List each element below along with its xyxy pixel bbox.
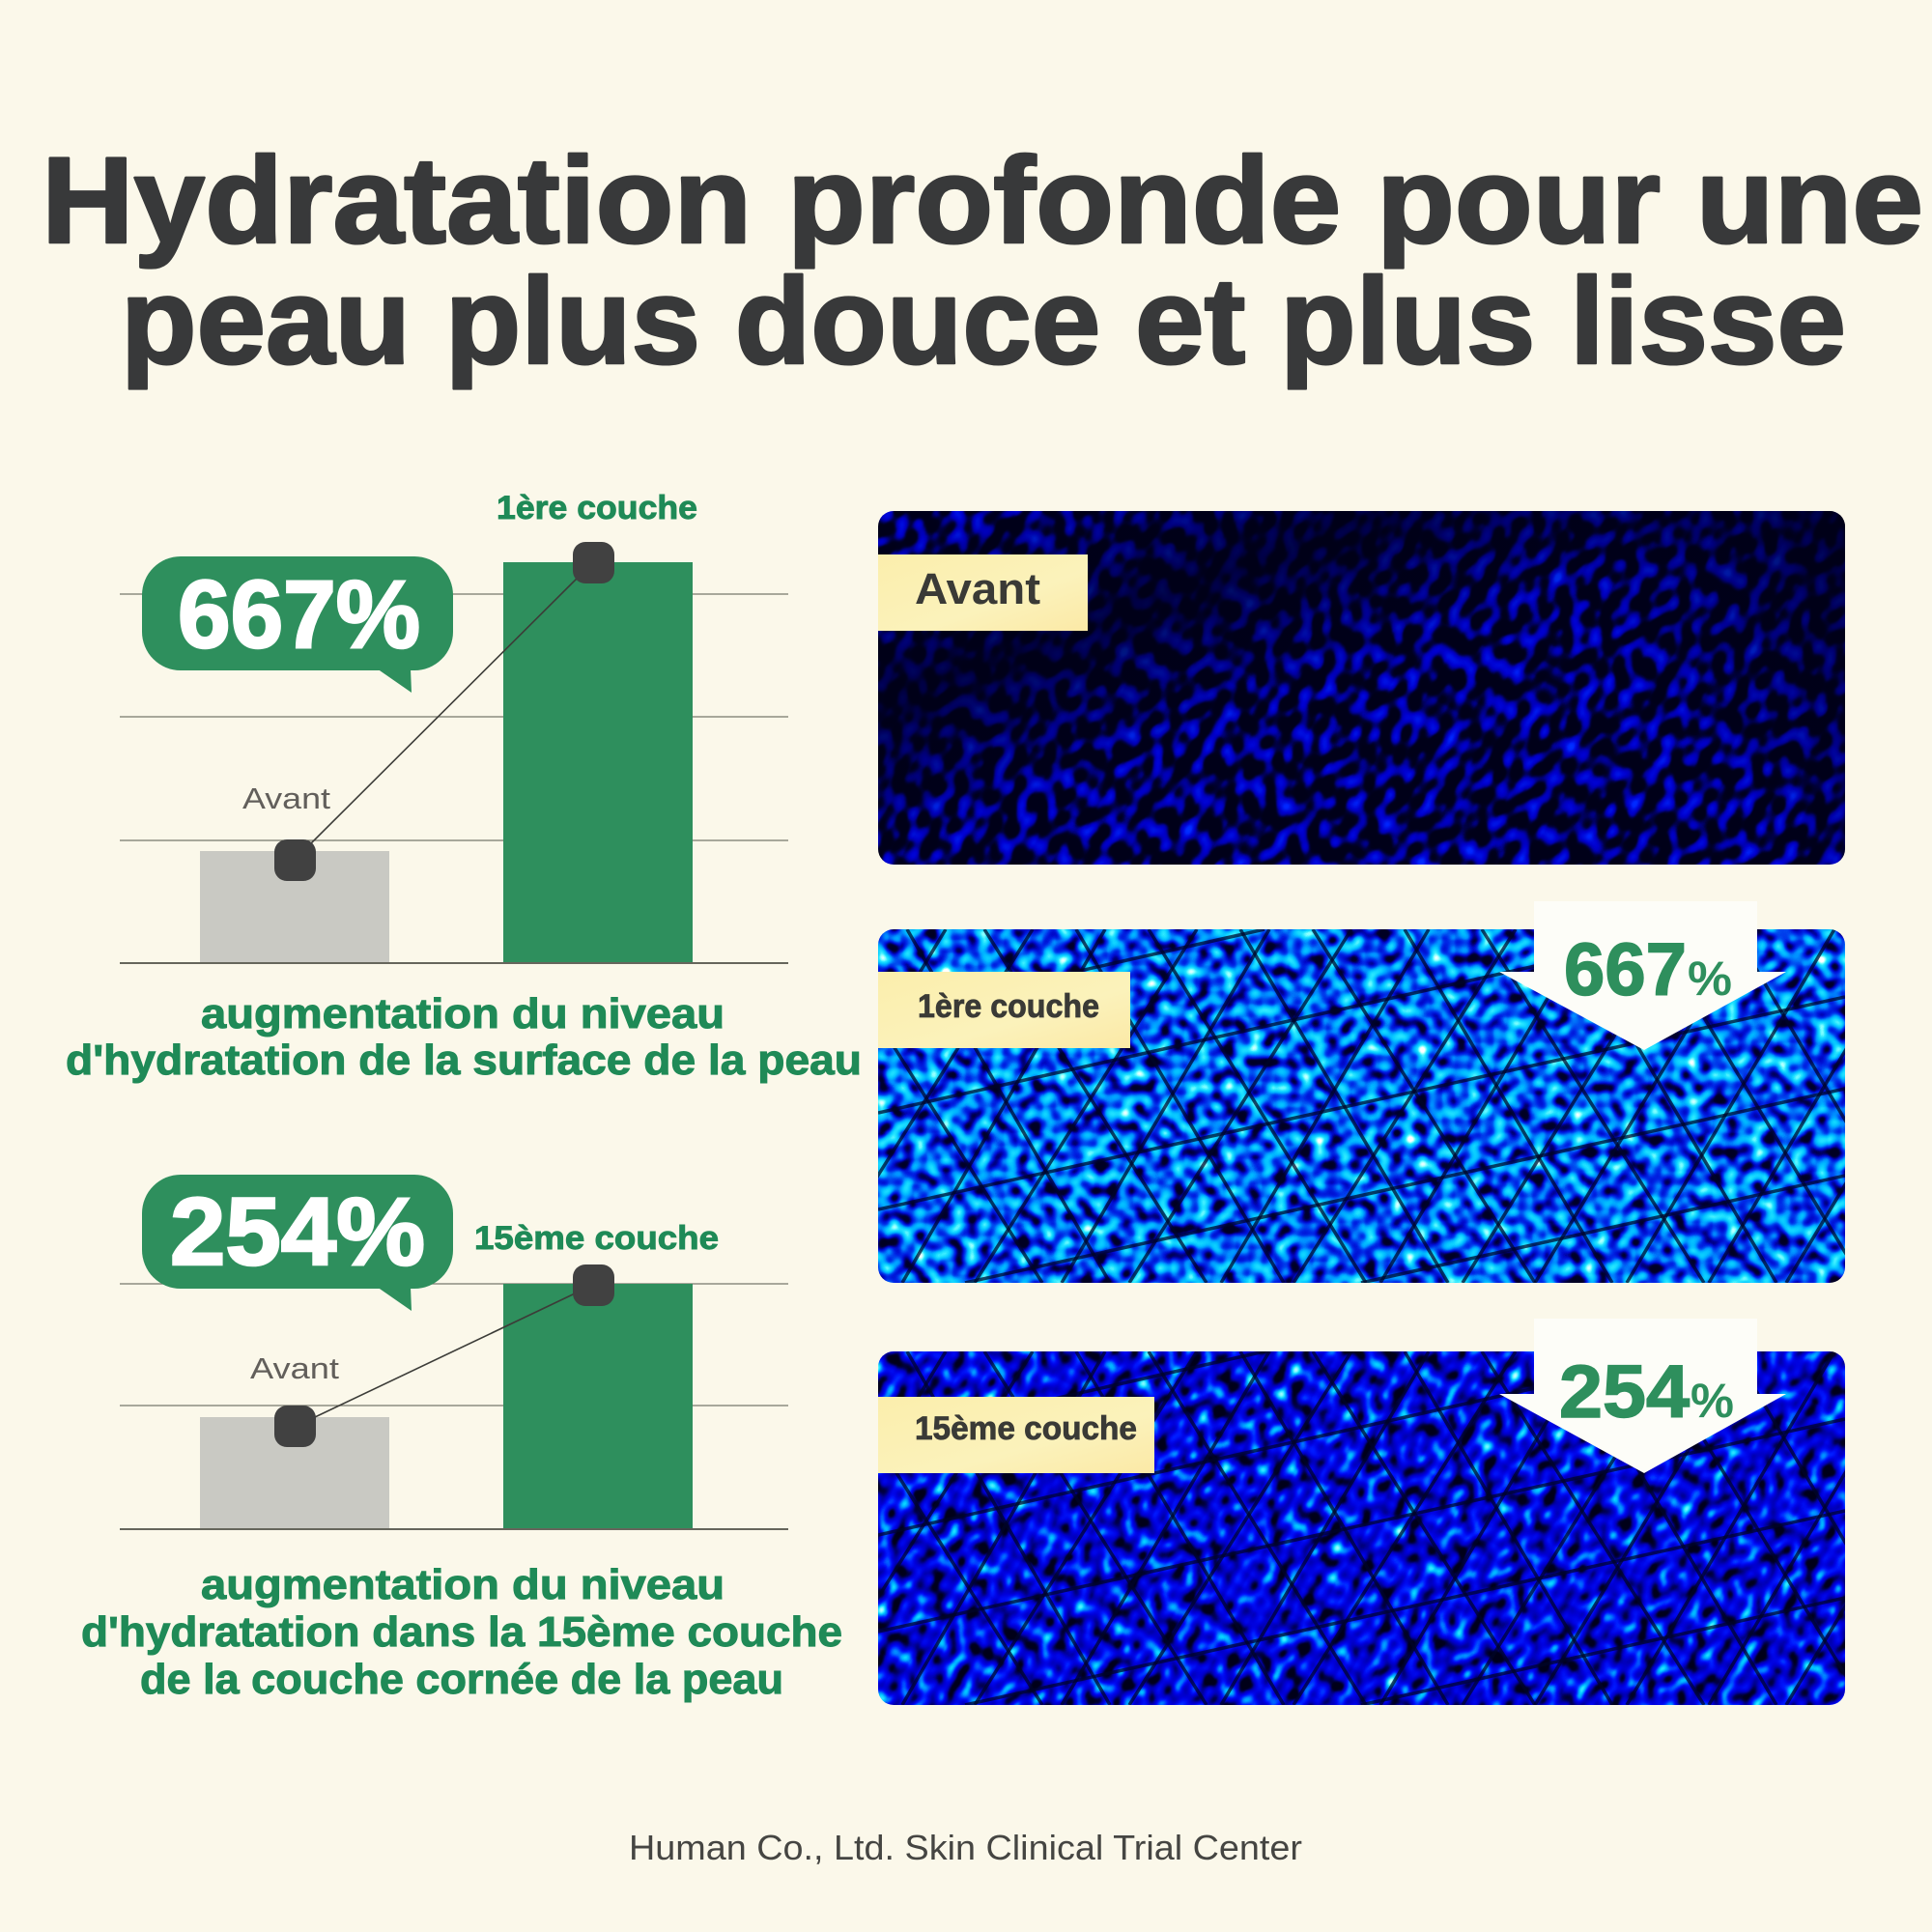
arrow: 254%: % — [1690, 1374, 1734, 1428]
label: avant: Avant — [250, 1351, 339, 1385]
arrow: 667%: % — [1688, 952, 1732, 1006]
callout: 667%: 667% — [178, 560, 420, 668]
bar chart: surface — [120, 490, 788, 963]
bar: 1ère couche — [503, 562, 693, 962]
arrow: 254% — [1499, 1319, 1786, 1473]
text block: surface: augmentation du niveau — [201, 990, 724, 1037]
panel: avant image — [878, 511, 1845, 865]
marker: avant — [274, 839, 316, 881]
title — [42, 131, 1923, 389]
text block: 15ème couche: de la couche cornée de la peau — [140, 1656, 783, 1703]
callout: 667% — [142, 556, 453, 693]
text block: surface — [66, 990, 862, 1084]
marker: 15ème couche — [573, 1264, 614, 1306]
marker: 1ère couche — [573, 542, 614, 583]
callout: 254% — [142, 1175, 453, 1311]
bar: avant — [200, 1417, 389, 1528]
arrow: 667%: 667 — [1564, 928, 1687, 1011]
label: avant: Avant — [915, 564, 1040, 613]
label: 1ère couche — [878, 972, 1130, 1048]
marker: avant — [274, 1406, 316, 1447]
text block: surface: d'hydratation de la surface de la peau — [66, 1037, 862, 1084]
arrow: 667% — [1499, 901, 1786, 1050]
trend line — [295, 562, 593, 860]
panel: 1ère couche image — [878, 901, 1845, 1283]
label: 1ère couche: 1ère couche — [918, 988, 1099, 1025]
bar: 15ème couche — [503, 1284, 693, 1528]
label: 15ème couche: 15ème couche — [474, 1220, 719, 1257]
bar: avant — [200, 851, 389, 962]
text block: 15ème couche: augmentation du niveau — [201, 1561, 724, 1608]
trend line — [295, 1285, 593, 1427]
panel: 15ème couche image — [878, 1319, 1845, 1705]
label: 15ème couche: 15ème couche — [915, 1410, 1137, 1447]
bar chart: 15ème couche — [120, 1175, 788, 1529]
title: Hydratation profonde pour une — [42, 131, 1923, 269]
label: avant: Avant — [242, 781, 330, 815]
label: 1ère couche: 1ère couche — [497, 490, 697, 526]
arrow: 254%: 254 — [1559, 1350, 1690, 1434]
text block: 15ème couche — [81, 1561, 842, 1703]
label: 15ème couche — [878, 1397, 1154, 1473]
title: peau plus douce et plus lisse — [121, 252, 1846, 389]
text block: 15ème couche: d'hydratation dans la 15ème couche — [81, 1608, 842, 1656]
label: avant — [878, 554, 1088, 631]
footer source: Human Co., Ltd. Skin Clinical Trial Center — [629, 1828, 1302, 1867]
callout: 254%: 254% — [170, 1178, 425, 1285]
